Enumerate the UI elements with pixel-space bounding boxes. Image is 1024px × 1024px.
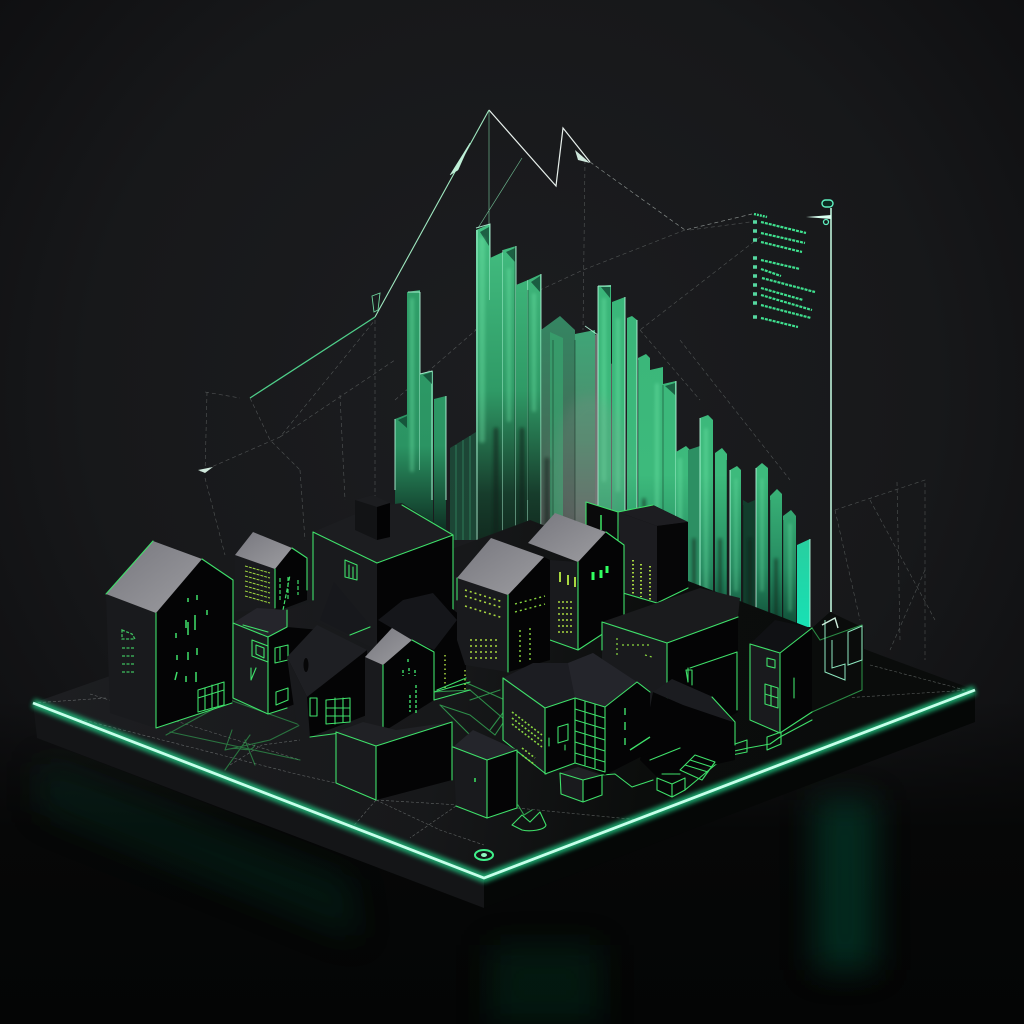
building: B small grey roof house bbox=[235, 532, 307, 612]
trend segment to peak bbox=[375, 110, 489, 317]
green floor web left bbox=[166, 700, 300, 770]
building: K grey roof house bbox=[528, 513, 624, 650]
building: N large flat block bbox=[602, 588, 740, 750]
platform right side bbox=[484, 690, 975, 908]
bar top facets bbox=[398, 227, 675, 428]
faint wireframe background lines bbox=[200, 160, 935, 660]
platform base bbox=[33, 520, 975, 908]
reflection: right bbox=[815, 800, 875, 970]
green floor web centre bbox=[433, 680, 505, 735]
windows right face bbox=[175, 595, 207, 682]
ground wiring bbox=[33, 665, 970, 845]
building: M back block bbox=[586, 502, 688, 603]
small plot grid bbox=[680, 755, 715, 780]
small dot bbox=[824, 220, 828, 224]
building: C small block bbox=[233, 608, 320, 714]
trend segment peaks bbox=[489, 110, 590, 186]
green floor reflections bbox=[40, 760, 875, 1024]
trend right dashed tail bbox=[590, 162, 752, 230]
building: F dark roof house bbox=[287, 625, 367, 737]
floor shading bbox=[0, 700, 1024, 1024]
floor ornament bbox=[512, 812, 546, 831]
white survey lines bbox=[33, 665, 970, 845]
building: P centre cluster bbox=[503, 653, 650, 775]
building: R small box bbox=[560, 767, 602, 802]
bar chart bbox=[395, 224, 810, 627]
thin bar separator lines bbox=[515, 246, 783, 625]
building: G small grey roof house bbox=[365, 628, 470, 732]
pole glow bbox=[829, 208, 833, 612]
flag flare bbox=[806, 215, 831, 219]
platform top bbox=[33, 520, 975, 878]
small wave bbox=[518, 805, 532, 815]
legend pole bbox=[806, 200, 833, 612]
door panel bbox=[198, 682, 224, 712]
small marker left bbox=[198, 467, 213, 473]
flag badge bbox=[822, 200, 833, 207]
building: I small front house bbox=[453, 730, 517, 818]
building: E dark roof house bbox=[378, 593, 466, 690]
grid facade bbox=[575, 698, 605, 772]
platform status ring bbox=[475, 850, 493, 860]
reflection: left bbox=[40, 760, 360, 940]
legend icons bbox=[753, 222, 757, 317]
building: D central block bbox=[313, 495, 453, 650]
chimney bbox=[355, 495, 390, 540]
legend header bbox=[754, 214, 767, 217]
bars: centre group bbox=[476, 224, 625, 620]
building: O right block bbox=[750, 620, 812, 733]
platform glowing edge bbox=[33, 690, 975, 878]
bar light highlights bbox=[412, 240, 790, 610]
legend list bbox=[753, 214, 815, 327]
small marker at knee bbox=[372, 293, 380, 312]
building: right outline tower bbox=[812, 612, 864, 713]
bar dark lower stripes bbox=[496, 430, 776, 625]
green winding path bbox=[602, 720, 812, 790]
bright rim bbox=[33, 690, 975, 878]
peak vertical drop bbox=[478, 110, 522, 228]
bars: left group bbox=[395, 290, 476, 540]
grey haze on bars bbox=[552, 395, 628, 545]
legend rows bbox=[761, 222, 815, 327]
bars: right group bbox=[598, 285, 810, 627]
glow halo bbox=[33, 690, 975, 878]
peak highlight bbox=[450, 143, 470, 175]
pole bbox=[830, 208, 832, 612]
building: J grey roof house bbox=[457, 538, 550, 672]
building: dark side roof on D bbox=[320, 582, 370, 635]
small plot outlines bbox=[732, 732, 781, 755]
building: A large grey roof house bbox=[106, 541, 233, 728]
building: H front box bbox=[336, 722, 452, 800]
reflection: centre bbox=[490, 945, 600, 1024]
line chart above bars bbox=[198, 110, 752, 473]
trend segment green bbox=[250, 317, 375, 398]
building: S tiny box bbox=[657, 771, 685, 797]
platform left side bbox=[33, 703, 484, 908]
small marker peak right bbox=[575, 150, 590, 163]
building: Q dark house bbox=[640, 679, 735, 780]
city buildings bbox=[106, 495, 864, 818]
